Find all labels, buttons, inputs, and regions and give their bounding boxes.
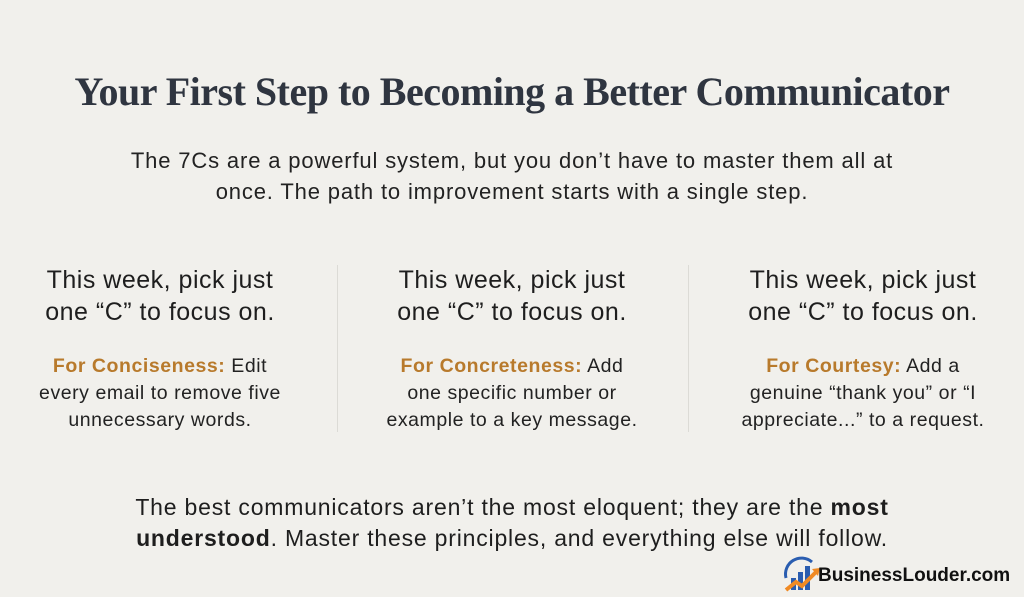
panel: concreteness: This week, pick just <box>399 266 625 294</box>
closing text: The best communicators aren’t the most eloquent; they are the most <box>135 494 889 520</box>
panel: conciseness: unnecessary words. <box>68 409 252 431</box>
panel: concreteness: one “C” to focus on. <box>397 298 627 326</box>
panel: courtesy <box>741 266 985 431</box>
brand name: BusinessLouder.com <box>818 565 1010 586</box>
panel: courtesy: For Courtesy: Add a <box>766 355 960 377</box>
closing text: understood. Master these principles, and everything else will follow. <box>136 525 888 551</box>
panel: conciseness: every email to remove five <box>39 382 281 404</box>
subtitle: The 7Cs are a powerful system, but you don’t have to master them all at <box>131 148 893 173</box>
subtitle: once. The path to improvement starts with a single step. <box>216 179 808 204</box>
logo <box>784 556 1010 592</box>
panel: concreteness: one specific number or <box>407 382 617 404</box>
subtitle <box>131 148 893 204</box>
panel: conciseness: one “C” to focus on. <box>45 298 275 326</box>
panel: concreteness <box>386 266 638 431</box>
title: Your First Step to Becoming a Better Communicator <box>74 69 950 114</box>
panel: concreteness: example to a key message. <box>386 409 638 431</box>
closing text <box>135 494 889 551</box>
panel: courtesy: appreciate...” to a request. <box>741 409 985 431</box>
panel: courtesy: one “C” to focus on. <box>748 298 978 326</box>
panel: conciseness: For Conciseness: Edit <box>53 355 267 377</box>
panel: courtesy: This week, pick just <box>750 266 976 294</box>
panel: courtesy: genuine “thank you” or “I <box>750 382 976 404</box>
panel: concreteness: For Concreteness: Add <box>401 355 623 377</box>
icon: chart logo <box>784 556 820 592</box>
panel: conciseness: This week, pick just <box>47 266 273 294</box>
panel: conciseness <box>39 266 281 431</box>
